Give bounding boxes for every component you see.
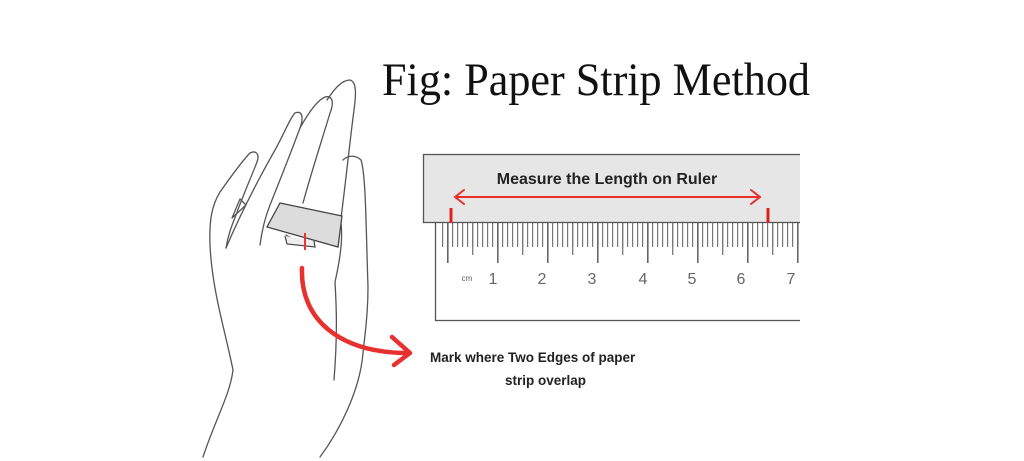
arrow: curved red [302, 268, 410, 365]
ruler top panel [424, 154, 814, 222]
ruler numbers: 6 [737, 271, 746, 288]
measure arrow [455, 190, 760, 204]
hand illustration [203, 80, 368, 457]
ruler numbers: 1 [489, 271, 498, 288]
ruler numbers: 5 [688, 271, 697, 288]
ruler label: Measure the Length on Ruler [497, 171, 717, 188]
callout text [430, 350, 636, 388]
callout text: strip overlap [505, 373, 586, 388]
ruler numbers: 2 [538, 271, 547, 288]
title: Fig: Paper Strip Method [382, 54, 810, 106]
ruler numbers: cm [462, 274, 473, 283]
ruler numbers: 7 [787, 271, 796, 288]
ruler numbers: 3 [588, 271, 597, 288]
paper strip [267, 203, 342, 250]
ruler numbers: 4 [639, 271, 648, 288]
red marks [451, 208, 768, 223]
ruler [424, 150, 830, 330]
ruler numbers [462, 271, 796, 288]
callout text: Mark where Two Edges of paper [430, 350, 636, 365]
